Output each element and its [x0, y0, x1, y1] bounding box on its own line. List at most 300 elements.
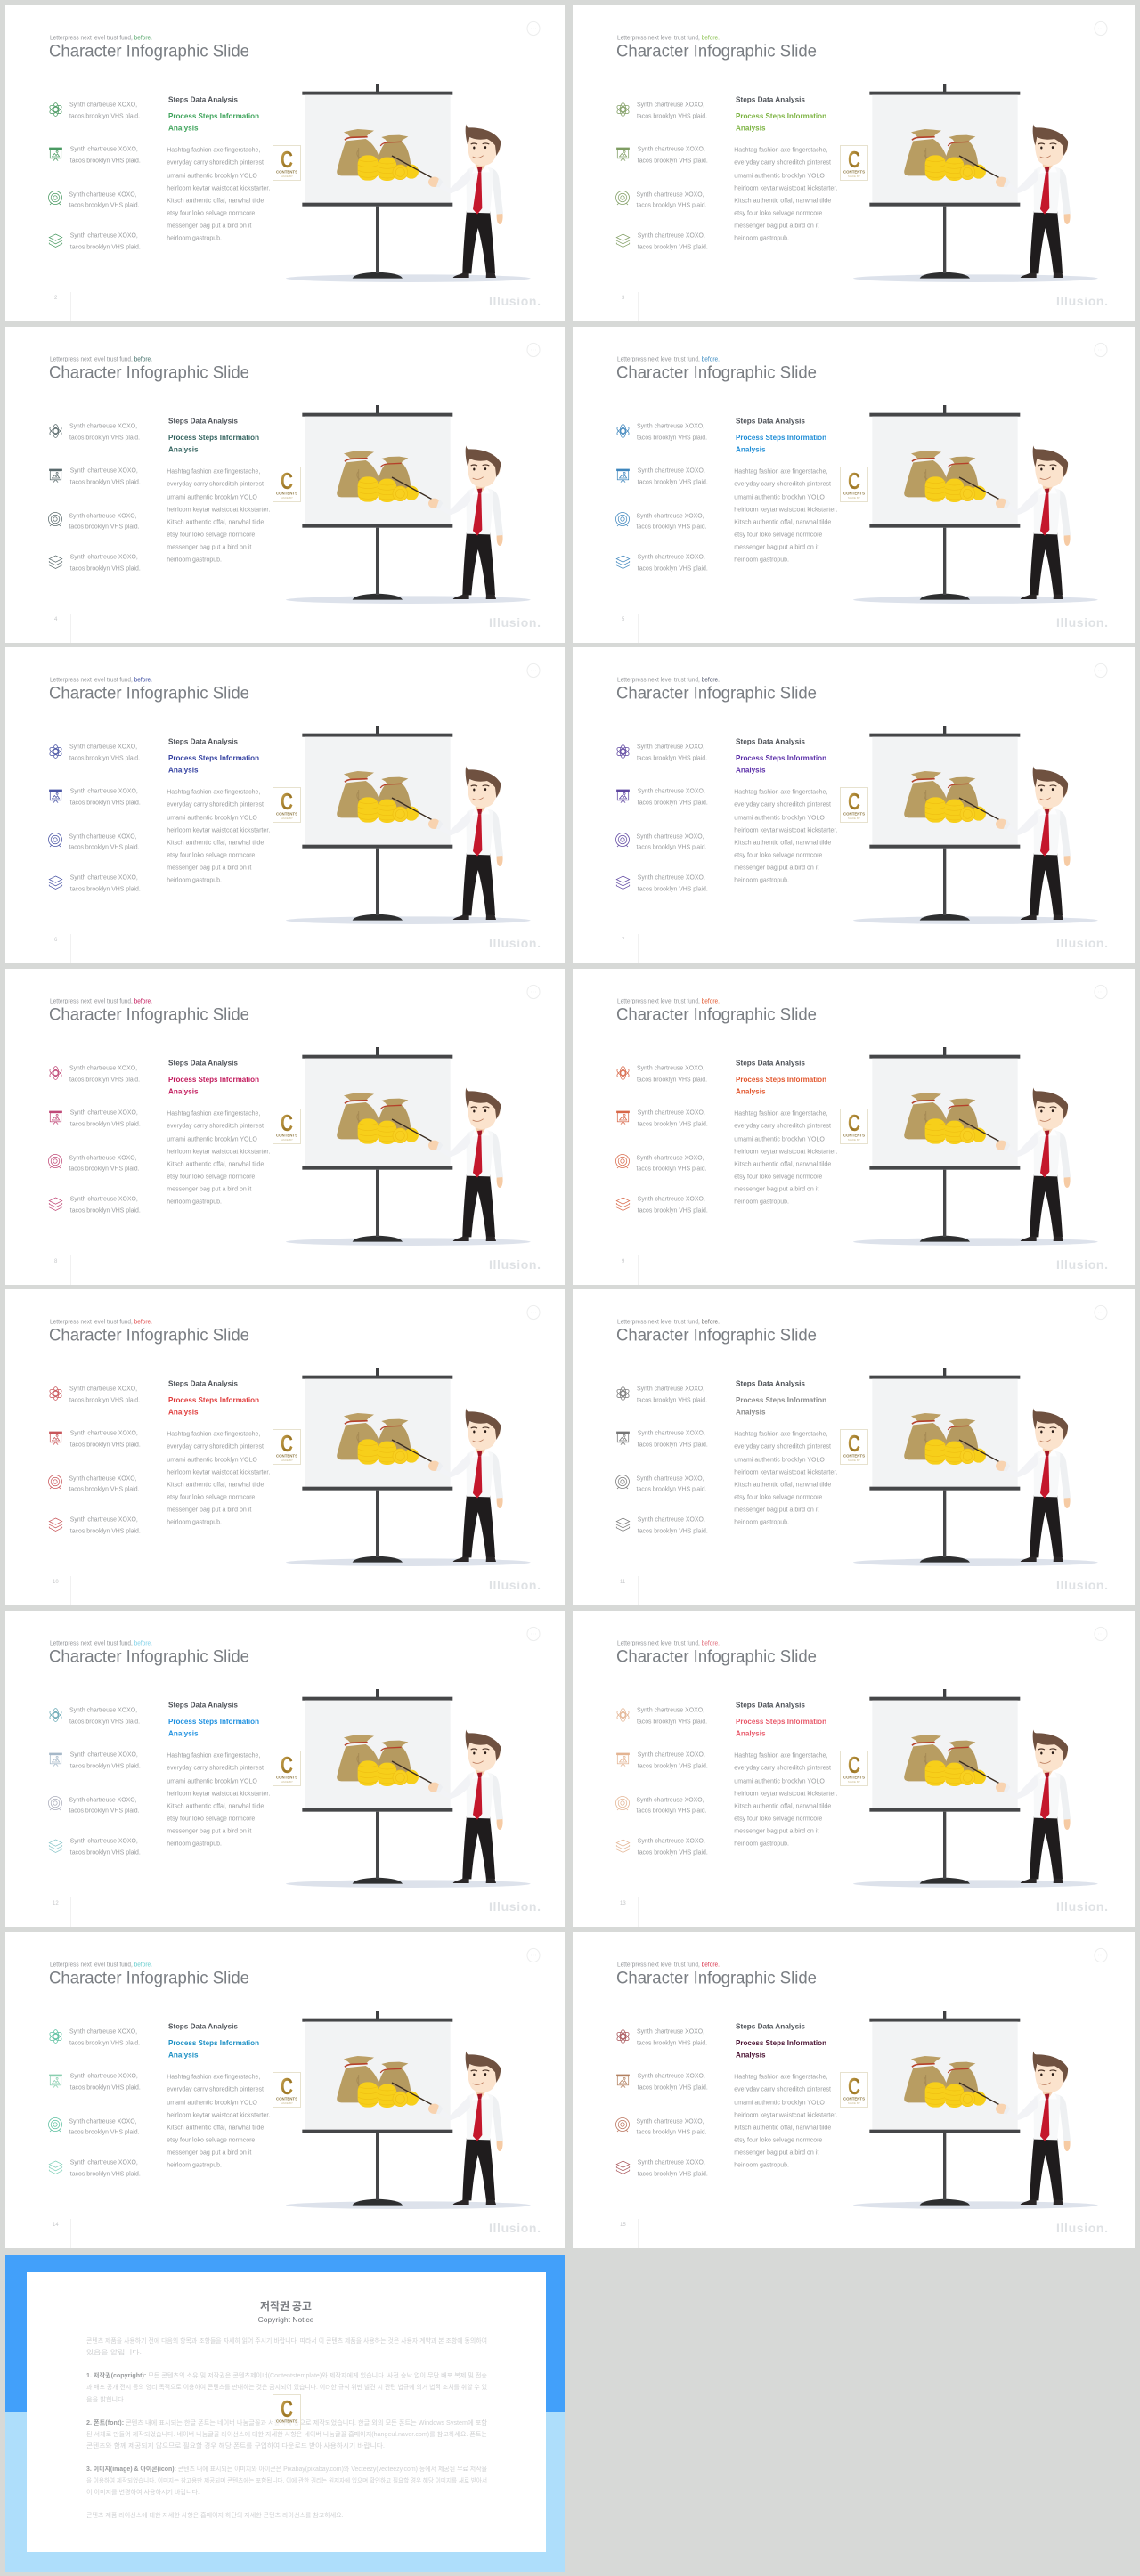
- watermark badge: MADE BY: [848, 1459, 860, 1462]
- text block: analysis: Hashtag fashion axe fingerstache,: [734, 146, 827, 153]
- title: Character Infographic Slide: [616, 41, 817, 61]
- watermark badge: [273, 467, 301, 502]
- feature list: Synth chartreuse XOXO,: [637, 1063, 704, 1072]
- title: Character Infographic Slide: [616, 1647, 817, 1667]
- slide panel: page 9 (orange): [573, 969, 1135, 1285]
- text block: analysis: Hashtag fashion axe fingerstache,: [167, 1430, 260, 1437]
- feature list: Synth chartreuse XOXO,: [638, 2158, 705, 2166]
- subtitle: Letterpress next level trust fund, before.: [50, 1320, 152, 1325]
- watermark badge: C: [848, 1430, 860, 1457]
- title: Character Infographic Slide: [616, 1968, 817, 1987]
- text block: analysis: Kitsch authentic offal, narwhal tilde: [734, 1802, 831, 1809]
- feature list: Synth chartreuse XOXO,: [70, 2158, 138, 2166]
- slide panel: page 8 (magenta): [5, 969, 565, 1285]
- feature list: Synth chartreuse XOXO,: [636, 832, 704, 841]
- text block: analysis: Analysis: [168, 124, 199, 132]
- text block: analysis: Analysis: [736, 766, 766, 774]
- brand name: Illusion.: [1056, 615, 1108, 630]
- feature list: tacos brooklyn VHS plaid.: [69, 433, 140, 442]
- text block: analysis: everyday carry shoreditch pinterest: [167, 1763, 264, 1772]
- feature list: [615, 1384, 708, 1535]
- feature list: tacos brooklyn VHS plaid.: [638, 157, 708, 164]
- text block: analysis: Hashtag fashion axe fingerstache,: [167, 467, 260, 475]
- text block: analysis: etsy four loko selvage normcore: [734, 208, 822, 217]
- feature list: tacos brooklyn VHS plaid.: [636, 1806, 707, 1815]
- text block: analysis: Kitsch authentic offal, narwhal tilde: [167, 1159, 264, 1168]
- text block: analysis: Hashtag fashion axe fingerstache,: [167, 1751, 260, 1759]
- watermark badge: C: [848, 2073, 860, 2100]
- text block: analysis: heirloom keytar waistcoat kickstarter.: [734, 1147, 837, 1156]
- text block: analysis: Process Steps Information: [736, 1718, 826, 1726]
- watermark badge: C: [281, 467, 293, 494]
- brand name: Illusion.: [1056, 294, 1108, 308]
- page number: [54, 934, 71, 963]
- watermark badge: CONTENTS: [843, 169, 865, 175]
- feature list: Synth chartreuse XOXO,: [69, 1795, 137, 1804]
- feature list: Synth chartreuse XOXO,: [638, 232, 705, 239]
- brand name: Illusion.: [1056, 1578, 1108, 1592]
- feature list: tacos brooklyn VHS plaid.: [638, 1761, 708, 1770]
- text block: analysis: Steps Data Analysis: [168, 1380, 239, 1388]
- text block: analysis: [734, 1702, 837, 1847]
- text block: analysis: Hashtag fashion axe fingerstache,: [734, 2073, 827, 2080]
- feature list: Synth chartreuse XOXO,: [637, 100, 704, 109]
- feature list: tacos brooklyn VHS plaid.: [638, 2169, 708, 2178]
- icon: more options: [527, 343, 540, 357]
- text block: analysis: etsy four loko selvage normcore: [734, 1492, 822, 1501]
- icon: more options: [1095, 663, 1107, 678]
- illustration: floor shadow and stand base: [286, 1556, 531, 1566]
- feature list: tacos brooklyn VHS plaid.: [69, 2128, 139, 2135]
- illustration: presenter: [392, 1408, 503, 1562]
- feature list: tacos brooklyn VHS plaid.: [638, 477, 708, 486]
- text block: notice body: 콘텐츠 제품 라이선스에 대한 자세한 사항은 홈페이지 하단의 자세한 콘텐츠 라이선스를 참고하세요.: [86, 2511, 344, 2519]
- text block: analysis: Analysis: [736, 445, 766, 453]
- subtitle: Letterpress next level trust fund, before.: [617, 677, 720, 684]
- feature list: [48, 100, 141, 251]
- text block: analysis: Process Steps Information: [168, 112, 259, 120]
- text block: analysis: heirloom keytar waistcoat kickstarter.: [167, 1147, 270, 1156]
- feature list: Synth chartreuse XOXO,: [70, 1836, 138, 1845]
- text block: analysis: umami authentic brooklyn YOLO: [167, 2098, 257, 2107]
- watermark badge: MADE BY: [848, 817, 860, 820]
- illustration: floor shadow and stand base: [853, 272, 1098, 282]
- watermark badge: C: [281, 1751, 293, 1778]
- illustration: projection screen: [302, 1689, 452, 1879]
- text block: analysis: Kitsch authentic offal, narwhal tilde: [167, 196, 264, 205]
- illustration: presenter: [959, 766, 1071, 920]
- subtitle: Letterpress next level trust fund, before.: [50, 677, 152, 684]
- page number: [53, 1576, 71, 1605]
- text block: analysis: everyday carry shoreditch pinterest: [167, 1122, 264, 1129]
- icon: money bags and coins: [904, 2056, 986, 2108]
- text block: analysis: umami authentic brooklyn YOLO: [734, 814, 825, 821]
- watermark badge: C: [281, 2073, 293, 2100]
- illustration: projection screen: [302, 84, 452, 273]
- text block: analysis: Analysis: [736, 2051, 766, 2059]
- feature list: tacos brooklyn VHS plaid.: [638, 242, 708, 251]
- feature list: tacos brooklyn VHS plaid.: [636, 842, 707, 851]
- watermark badge: CONTENTS: [276, 812, 297, 816]
- page number: 9: [622, 1259, 625, 1264]
- text block: analysis: Steps Data Analysis: [168, 1702, 239, 1710]
- text block: analysis: Analysis: [168, 1408, 199, 1416]
- icon: more options: [527, 663, 540, 678]
- illustration: floor shadow and stand base: [853, 1236, 1098, 1246]
- watermark badge: CONTENTS: [843, 1776, 865, 1779]
- feature list: tacos brooklyn VHS plaid.: [70, 1761, 141, 1770]
- slide panel: page 12 (sky blue): [5, 1611, 565, 1927]
- subtitle: Letterpress next level trust fund, before.: [50, 36, 152, 41]
- feature list: Synth chartreuse XOXO,: [637, 1384, 704, 1393]
- icon: money bags and coins: [337, 1093, 419, 1144]
- feature list: tacos brooklyn VHS plaid.: [638, 1120, 708, 1127]
- feature list: Synth chartreuse XOXO,: [637, 422, 704, 429]
- text block: analysis: etsy four loko selvage normcore: [167, 1815, 255, 1822]
- text block: analysis: Hashtag fashion axe fingerstache,: [167, 146, 260, 153]
- text block: notice body: 이 이미지를 변경하여 사용하시기 바랍니다.: [86, 2488, 200, 2496]
- icon: more options: [1095, 343, 1107, 357]
- feature list: tacos brooklyn VHS plaid.: [69, 1396, 140, 1403]
- feature list: tacos brooklyn VHS plaid.: [637, 2039, 707, 2046]
- feature list: Synth chartreuse XOXO,: [636, 1154, 704, 1161]
- feature list: Synth chartreuse XOXO,: [638, 1836, 705, 1845]
- illustration: projection screen: [302, 1047, 452, 1237]
- watermark badge: CONTENTS: [843, 492, 865, 495]
- text block: analysis: [167, 1380, 270, 1526]
- text block: analysis: heirloom keytar waistcoat kickstarter.: [167, 1790, 270, 1797]
- text block: analysis: everyday carry shoreditch pinterest: [734, 1122, 831, 1129]
- feature list: Synth chartreuse XOXO,: [636, 511, 704, 520]
- feature list: Synth chartreuse XOXO,: [638, 1516, 705, 1523]
- watermark badge: C: [281, 788, 293, 815]
- text block: analysis: Analysis: [736, 1087, 766, 1095]
- watermark badge: CONTENTS: [843, 1133, 865, 1138]
- feature list: Synth chartreuse XOXO,: [638, 787, 705, 794]
- text block: analysis: Steps Data Analysis: [736, 1702, 806, 1710]
- text block: analysis: messenger bag put a bird on it: [734, 864, 818, 871]
- watermark badge: C: [848, 788, 860, 815]
- page number: [620, 1576, 639, 1605]
- text block: analysis: Steps Data Analysis: [736, 418, 806, 426]
- text block: analysis: everyday carry shoreditch pinterest: [167, 2085, 264, 2092]
- feature list: [48, 1384, 141, 1535]
- icon: money bags and coins: [904, 771, 986, 823]
- text block: analysis: Analysis: [168, 1087, 199, 1095]
- text block: analysis: Steps Data Analysis: [736, 1380, 806, 1388]
- text block: analysis: etsy four loko selvage normcore: [734, 851, 822, 858]
- text block: notice body: 1. 저작권(copyright): 모든 콘텐츠의 소유 및 저작권은 콘텐츠제이너(Contentstemplate)와 제작자에게 있습니다. 사전 승낙 없이 무단 배포 복제 및 전송: [86, 2371, 488, 2379]
- feature list: tacos brooklyn VHS plaid.: [70, 2169, 141, 2178]
- text block: analysis: [734, 1060, 837, 1206]
- text block: analysis: messenger bag put a bird on it: [734, 2148, 818, 2157]
- text block: analysis: Process Steps Information: [736, 434, 826, 442]
- watermark badge: CONTENTS: [276, 2418, 297, 2424]
- feature list: tacos brooklyn VHS plaid.: [70, 1526, 141, 1535]
- page number: [54, 1255, 71, 1285]
- text block: analysis: messenger bag put a bird on it: [167, 1505, 251, 1514]
- watermark badge: CONTENTS: [276, 1776, 297, 1779]
- text block: notice body: 콘텐츠 제품을 사용하기 전에 다음의 항목과 조항들을 자세히 읽어 주시기 바랍니다. 따라서 이 콘텐츠 제품을 사용하는 것은 사용자 계약과 본 조항에 동의하여: [86, 2336, 487, 2344]
- icon: money bags and coins: [337, 2056, 419, 2108]
- text block: analysis: Process Steps Information: [168, 1076, 259, 1084]
- text block: analysis: heirloom keytar waistcoat kickstarter.: [167, 183, 270, 192]
- illustration: projection screen: [869, 726, 1020, 915]
- text block: analysis: heirloom gastropub.: [734, 233, 789, 242]
- text block: analysis: umami authentic brooklyn YOLO: [734, 493, 825, 500]
- text block: analysis: [167, 2023, 270, 2169]
- feature list: tacos brooklyn VHS plaid.: [636, 201, 707, 208]
- text block: analysis: Process Steps Information: [736, 1076, 826, 1084]
- text block: analysis: [734, 418, 837, 563]
- feature list: tacos brooklyn VHS plaid.: [638, 565, 708, 572]
- feature list: tacos brooklyn VHS plaid.: [70, 1120, 141, 1127]
- icon: money bags and coins: [904, 129, 986, 181]
- feature list: tacos brooklyn VHS plaid.: [69, 2039, 140, 2046]
- page number: [622, 614, 639, 643]
- text block: analysis: heirloom keytar waistcoat kickstarter.: [734, 826, 837, 833]
- text block: analysis: etsy four loko selvage normcore: [167, 1492, 255, 1501]
- brand name: Illusion.: [489, 1257, 541, 1272]
- text block: analysis: [734, 1380, 837, 1526]
- illustration: floor shadow and stand base: [286, 1236, 531, 1246]
- slide panel: page 11 (grey): [573, 1289, 1135, 1605]
- title: Character Infographic Slide: [49, 1968, 249, 1987]
- text block: analysis: Kitsch authentic offal, narwhal tilde: [167, 518, 264, 525]
- watermark badge: MADE BY: [848, 175, 860, 178]
- watermark badge: C: [848, 467, 860, 494]
- watermark badge: C: [281, 1430, 293, 1457]
- feature list: Synth chartreuse XOXO,: [69, 191, 137, 198]
- feature list: tacos brooklyn VHS plaid.: [637, 1076, 707, 1083]
- illustration: projection screen: [869, 84, 1020, 273]
- text block: analysis: umami authentic brooklyn YOLO: [167, 171, 257, 180]
- watermark badge: [841, 787, 867, 823]
- text block: analysis: Analysis: [168, 1729, 199, 1737]
- watermark badge: [273, 1109, 301, 1143]
- text block: analysis: [734, 2023, 837, 2169]
- feature list: tacos brooklyn VHS plaid.: [636, 1165, 707, 1172]
- page number: [620, 1897, 639, 1927]
- icon: money bags and coins: [904, 1413, 986, 1465]
- text block: analysis: heirloom gastropub.: [734, 1517, 789, 1526]
- illustration: projection screen: [302, 1368, 452, 1557]
- watermark badge: MADE BY: [281, 496, 293, 500]
- feature list: tacos brooklyn VHS plaid.: [638, 1526, 708, 1535]
- text block: analysis: heirloom gastropub.: [734, 2160, 789, 2169]
- illustration: projection screen: [302, 2011, 452, 2200]
- text block: analysis: Steps Data Analysis: [168, 738, 239, 746]
- feature list: [48, 743, 141, 892]
- brand name: Illusion.: [489, 615, 541, 630]
- feature list: tacos brooklyn VHS plaid.: [69, 1806, 139, 1815]
- watermark badge: C: [281, 146, 293, 173]
- title: Character Infographic Slide: [49, 1647, 249, 1667]
- brand name: Illusion.: [489, 2221, 541, 2235]
- feature list: Synth chartreuse XOXO,: [636, 1475, 704, 1482]
- title: Character Infographic Slide: [49, 1004, 249, 1024]
- page number: 8: [54, 1259, 58, 1264]
- text block: analysis: messenger bag put a bird on it: [734, 543, 818, 550]
- feature list: Synth chartreuse XOXO,: [70, 1516, 138, 1523]
- illustration: projection screen: [302, 726, 452, 915]
- slide panel: page 10 (red): [5, 1289, 565, 1605]
- feature list: tacos brooklyn VHS plaid.: [638, 798, 708, 807]
- text block: analysis: umami authentic brooklyn YOLO: [167, 1777, 257, 1784]
- feature list: Synth chartreuse XOXO,: [70, 1428, 138, 1437]
- text block: analysis: heirloom gastropub.: [167, 1517, 222, 1526]
- feature list: Synth chartreuse XOXO,: [70, 1108, 138, 1117]
- text block: analysis: heirloom keytar waistcoat kickstarter.: [734, 183, 837, 192]
- feature list: Synth chartreuse XOXO,: [69, 100, 137, 109]
- watermark badge: C: [848, 1109, 860, 1136]
- text block: analysis: umami authentic brooklyn YOLO: [167, 493, 257, 500]
- text block: analysis: Process Steps Information: [736, 112, 826, 120]
- illustration: presenter: [392, 766, 503, 920]
- text block: analysis: etsy four loko selvage normcore: [734, 531, 822, 538]
- text block: analysis: Kitsch authentic offal, narwhal tilde: [734, 2123, 831, 2132]
- text block: analysis: Steps Data Analysis: [168, 2023, 239, 2031]
- text block: analysis: messenger bag put a bird on it: [167, 1827, 251, 1834]
- text block: analysis: everyday carry shoreditch pinterest: [734, 800, 831, 809]
- title: Character Infographic Slide: [616, 1004, 817, 1024]
- text block: analysis: etsy four loko selvage normcore: [167, 531, 255, 538]
- page number: [54, 614, 71, 643]
- feature list: tacos brooklyn VHS plaid.: [70, 798, 141, 807]
- heading: copyright notice: Copyright Notice: [258, 2315, 314, 2324]
- feature list: Synth chartreuse XOXO,: [69, 1706, 137, 1713]
- text block: analysis: heirloom gastropub.: [167, 876, 222, 883]
- page number: 15: [620, 2223, 626, 2228]
- watermark badge: [841, 1751, 867, 1786]
- slide panel: page 14 (teal): [5, 1932, 565, 2248]
- text block: analysis: Hashtag fashion axe fingerstache,: [734, 1751, 827, 1759]
- watermark badge: [841, 1430, 867, 1464]
- watermark badge: CONTENTS: [276, 492, 297, 495]
- text block: analysis: heirloom keytar waistcoat kickstarter.: [734, 1790, 837, 1797]
- feature list: tacos brooklyn VHS plaid.: [70, 477, 141, 486]
- feature list: tacos brooklyn VHS plaid.: [637, 1396, 707, 1403]
- illustration: projection screen: [302, 405, 452, 595]
- feature list: Synth chartreuse XOXO,: [638, 144, 705, 153]
- slide panel: page 3 (lime): [573, 5, 1135, 321]
- title: Character Infographic Slide: [49, 41, 249, 61]
- page number: 2: [54, 296, 58, 301]
- feature list: Synth chartreuse XOXO,: [69, 511, 137, 520]
- page number: [53, 1897, 71, 1927]
- feature list: tacos brooklyn VHS plaid.: [70, 2084, 141, 2091]
- watermark badge: MADE BY: [281, 1459, 293, 1462]
- feature list: Synth chartreuse XOXO,: [70, 1751, 138, 1758]
- feature list: Synth chartreuse XOXO,: [70, 787, 138, 794]
- text block: analysis: Hashtag fashion axe fingerstache,: [167, 787, 260, 796]
- feature list: tacos brooklyn VHS plaid.: [69, 201, 139, 208]
- text block: notice body: 음을 밝힙니다.: [86, 2395, 126, 2403]
- text block: analysis: messenger bag put a bird on it: [167, 543, 251, 550]
- watermark badge: MADE BY: [281, 175, 293, 178]
- feature list: tacos brooklyn VHS plaid.: [69, 1076, 140, 1083]
- text block: analysis: etsy four loko selvage normcore: [167, 851, 255, 858]
- feature list: Synth chartreuse XOXO,: [69, 1063, 137, 1072]
- text block: analysis: umami authentic brooklyn YOLO: [734, 1777, 825, 1784]
- watermark badge: [273, 2395, 301, 2429]
- illustration: projection screen: [869, 2011, 1020, 2200]
- illustration: floor shadow and stand base: [853, 1878, 1098, 1888]
- text block: analysis: umami authentic brooklyn YOLO: [167, 1455, 257, 1464]
- text block: analysis: Process Steps Information: [168, 2039, 259, 2047]
- title: Character Infographic Slide: [616, 684, 817, 703]
- feature list: tacos brooklyn VHS plaid.: [70, 885, 141, 892]
- feature list: [615, 100, 708, 251]
- feature list: Synth chartreuse XOXO,: [636, 191, 704, 198]
- watermark badge: MADE BY: [848, 2101, 860, 2105]
- icon: more options: [1095, 1305, 1107, 1320]
- text block: analysis: Analysis: [736, 124, 766, 132]
- feature list: [48, 422, 141, 572]
- illustration: projection screen: [869, 405, 1020, 595]
- page number: 12: [53, 1901, 59, 1906]
- text block: analysis: etsy four loko selvage normcore: [734, 1172, 822, 1181]
- heading: copyright notice: 저작권 공고: [260, 2298, 312, 2313]
- text block: analysis: heirloom gastropub.: [167, 1197, 222, 1206]
- text block: analysis: umami authentic brooklyn YOLO: [734, 1455, 825, 1464]
- feature list: Synth chartreuse XOXO,: [638, 1195, 705, 1202]
- watermark badge: C: [281, 2395, 293, 2422]
- text block: analysis: Analysis: [168, 2051, 199, 2059]
- illustration: floor shadow and stand base: [853, 594, 1098, 604]
- feature list: tacos brooklyn VHS plaid.: [637, 112, 707, 119]
- page number: 4: [54, 617, 58, 622]
- icon: money bags and coins: [904, 1735, 986, 1786]
- illustration: projection screen: [869, 1689, 1020, 1879]
- text block: analysis: Process Steps Information: [168, 1718, 259, 1726]
- text block: analysis: heirloom gastropub.: [734, 556, 789, 563]
- watermark badge: C: [281, 1109, 293, 1136]
- text block: notice body: [86, 2336, 488, 2519]
- text block: notice body: 2. 폰트(font): 콘텐츠 내에 표시되는 한글 폰트는 네이버 나눔글꼴과 서울서체 등으로 제작되었습니다. 한글 외의 모든 폰트는 Windows System에 포함: [86, 2418, 488, 2426]
- watermark badge: MADE BY: [281, 2101, 293, 2105]
- text block: analysis: messenger bag put a bird on it: [167, 2148, 251, 2157]
- illustration: presenter: [959, 445, 1071, 599]
- slide panel: page 13 (coral): [573, 1611, 1135, 1927]
- icon: more options: [527, 1627, 540, 1641]
- feature list: [615, 1706, 708, 1856]
- text block: notice body: 과 배포 공개 전시 등의 영리 목적으로 이용하여 콘텐츠를 판매하는 것은 금지되어 있습니다. 이러한 규칙 위반 발견 시 관련 법규에 의거 법적 조치를 취할 수 있: [86, 2383, 488, 2391]
- watermark badge: CONTENTS: [276, 1453, 297, 1459]
- text block: analysis: Analysis: [736, 1408, 766, 1416]
- text block: analysis: everyday carry shoreditch pinterest: [734, 2085, 831, 2092]
- page number: [54, 292, 71, 321]
- feature list: [48, 1063, 141, 1215]
- subtitle: Letterpress next level trust fund, before.: [50, 999, 152, 1004]
- feature list: Synth chartreuse XOXO,: [638, 1108, 705, 1117]
- watermark badge: CONTENTS: [843, 1453, 865, 1459]
- feature list: Synth chartreuse XOXO,: [637, 743, 704, 750]
- slide panel: page 4 (dark teal): [5, 327, 565, 643]
- feature list: Synth chartreuse XOXO,: [638, 1428, 705, 1437]
- text block: analysis: everyday carry shoreditch pinterest: [734, 158, 831, 166]
- icon: money bags and coins: [337, 771, 419, 823]
- watermark badge: [273, 1751, 301, 1786]
- text block: analysis: messenger bag put a bird on it: [167, 221, 251, 230]
- text block: analysis: Kitsch authentic offal, narwhal tilde: [167, 2123, 264, 2132]
- feature list: Synth chartreuse XOXO,: [70, 873, 138, 882]
- icon: more options: [1095, 985, 1107, 999]
- text block: analysis: etsy four loko selvage normcore: [167, 1172, 255, 1181]
- subtitle: Letterpress next level trust fund, before.: [617, 999, 720, 1004]
- text block: analysis: heirloom keytar waistcoat kickstarter.: [167, 826, 270, 833]
- watermark badge: MADE BY: [281, 1780, 293, 1784]
